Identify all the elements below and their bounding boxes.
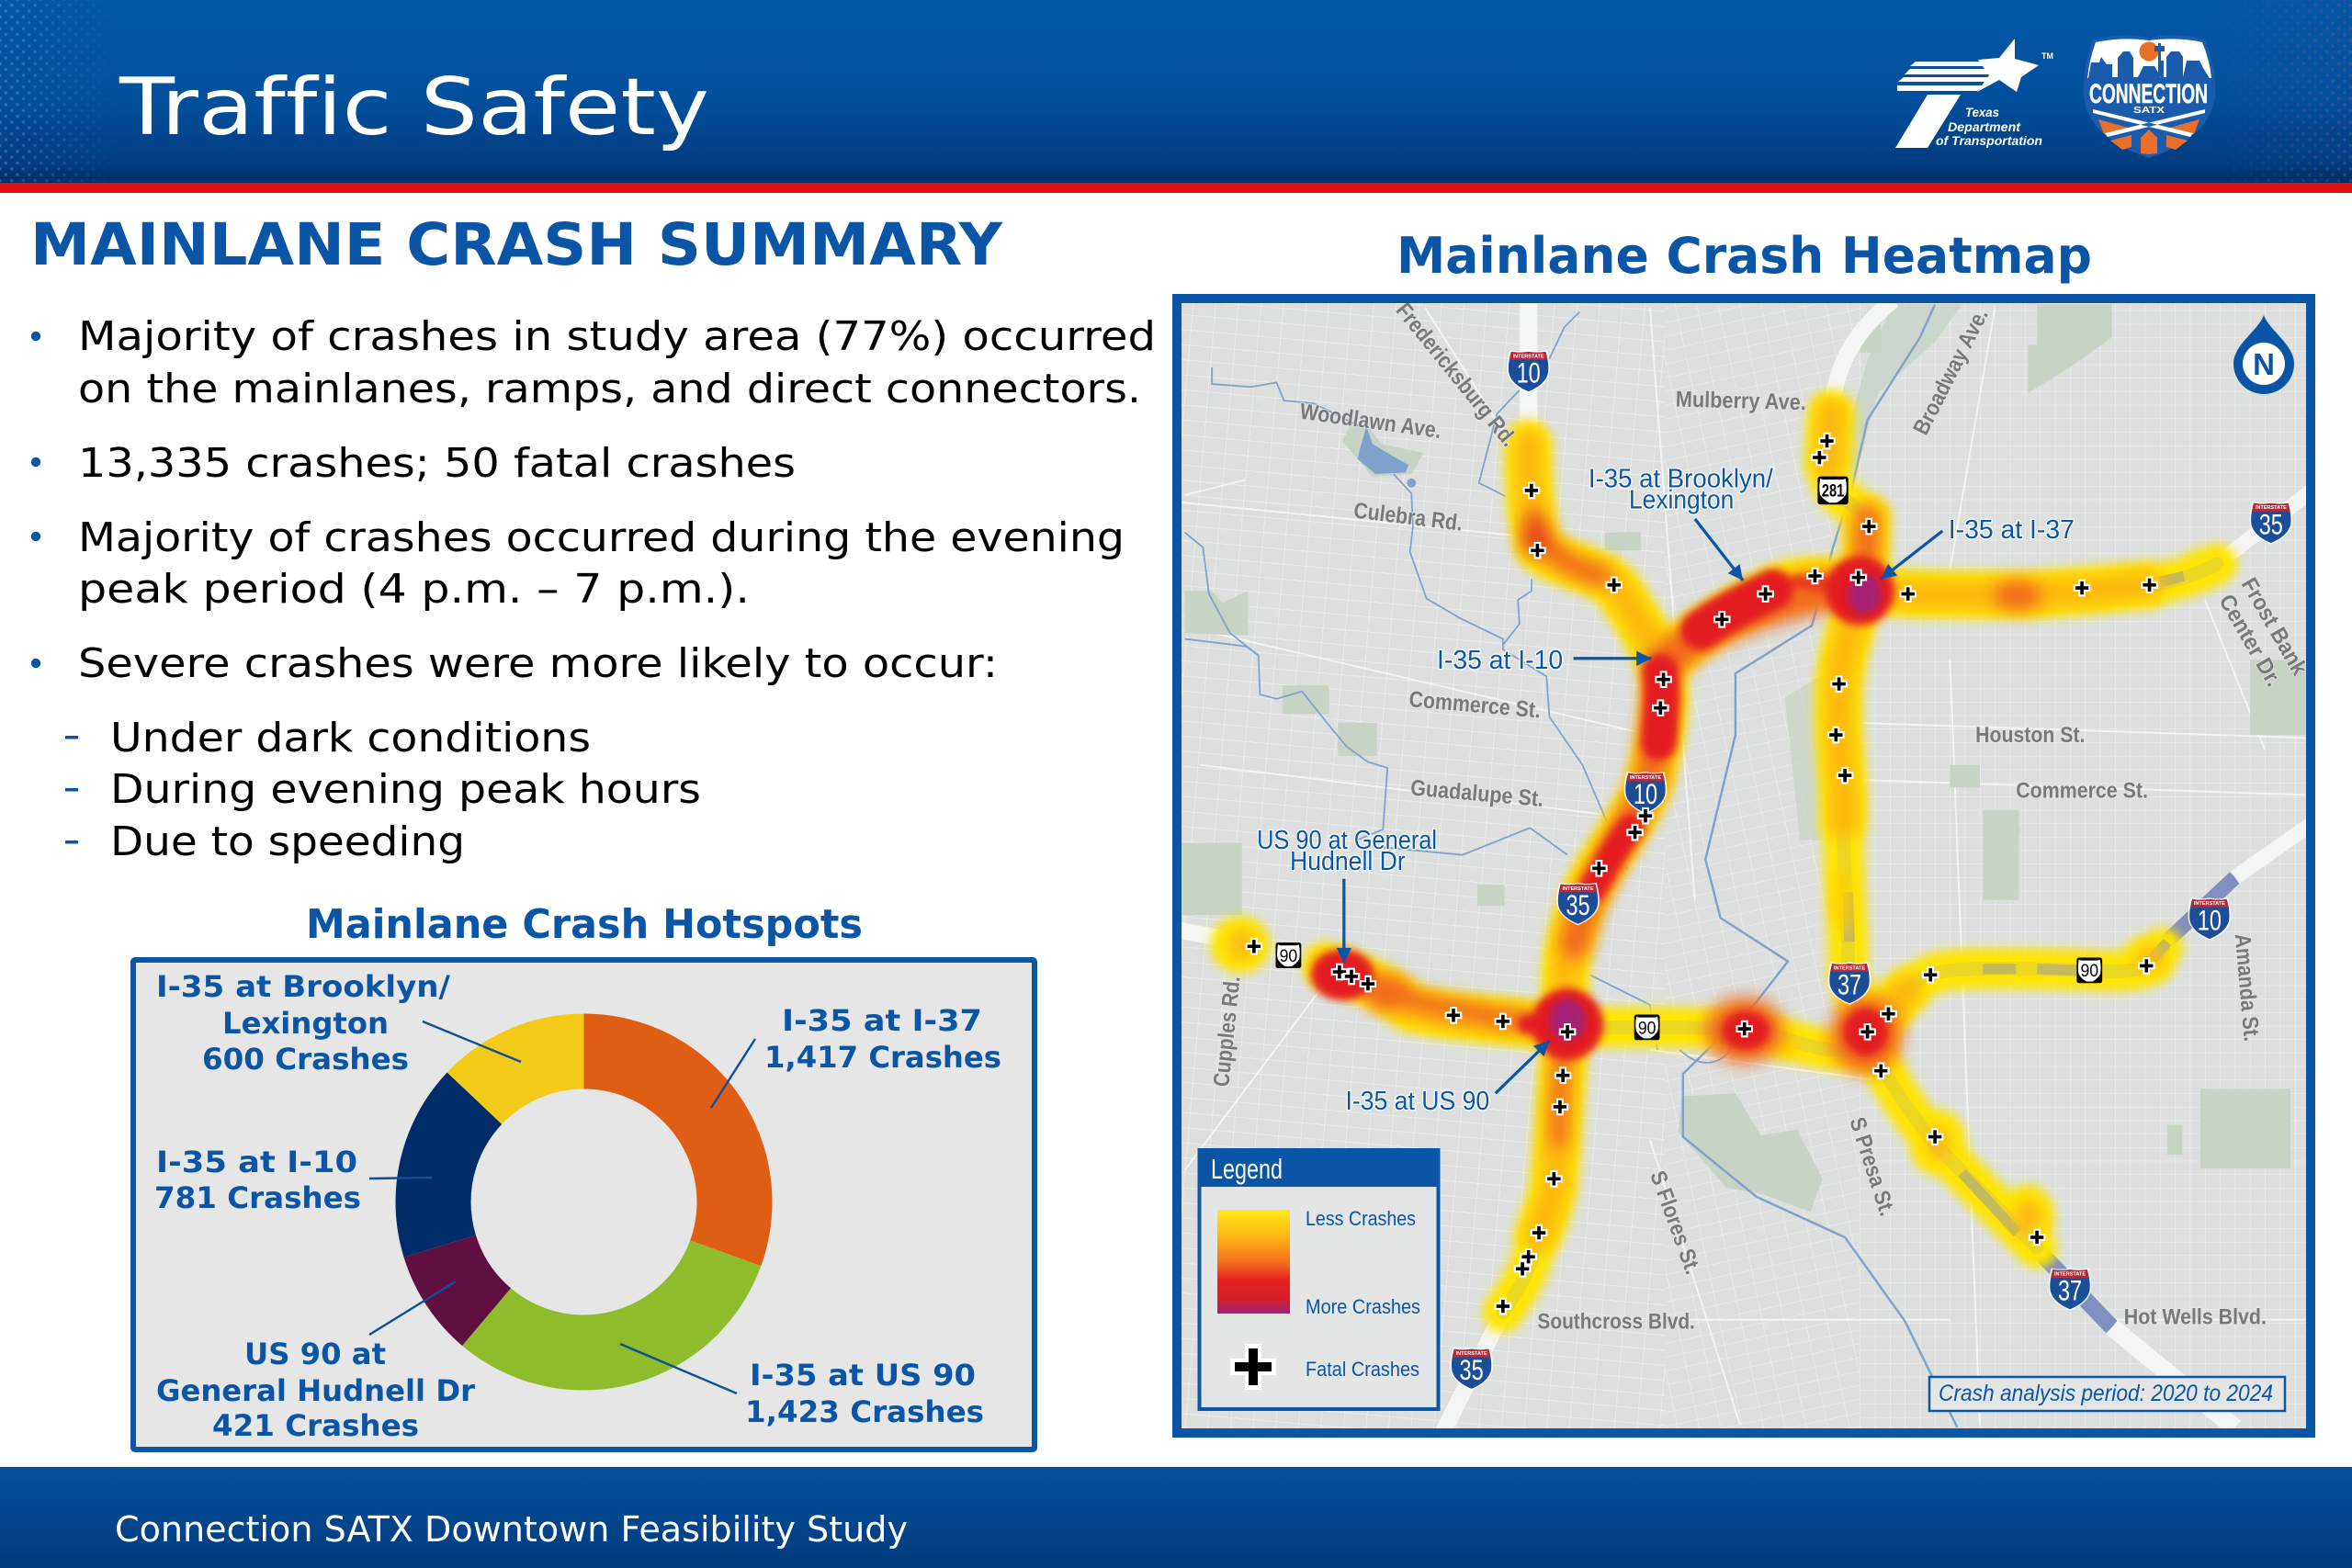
- label: US 90 at General Hudnell Dr: General Hudnell Dr: [156, 1373, 475, 1408]
- title: Traffic Safety: [119, 62, 709, 153]
- US highway shields: 90: [1638, 1018, 1657, 1038]
- US highway shields: 90: [2080, 961, 2098, 981]
- leader lines: [369, 1021, 755, 1393]
- road labels: Houston St.: [1975, 723, 2085, 748]
- icon: TxDOT logo: of Transportation: [1936, 133, 2042, 148]
- bullet list: crash summary: During evening peak hours: [110, 766, 701, 813]
- road labels: [1209, 299, 2312, 1335]
- icon: lake: [1358, 426, 1416, 488]
- road labels: Cupples Rd.: [1209, 975, 1246, 1088]
- interstate shields: 10: [1634, 778, 1657, 810]
- label: I-35 at I-10: I-35 at I-10: [156, 1145, 357, 1179]
- icon: north arrow: [2233, 315, 2294, 394]
- callout: I-35 at US 90: [1345, 1041, 1549, 1116]
- street grid: [1170, 292, 2310, 1448]
- bullet list: crash summary: Majority of crashes in study area (77%) occurred: [78, 313, 1156, 360]
- grey highway sections: [1848, 576, 2184, 1233]
- highways: [1178, 300, 2310, 1432]
- road labels: Southcross Blvd.: [1537, 1310, 1695, 1335]
- road labels: Fredericksburg Rd.: [1391, 299, 1521, 452]
- callout: US 90 at General Hudnell Dr: Hudnell Dr: [1290, 847, 1406, 876]
- label: I-35 at US 90: 1,423 Crashes: [745, 1394, 984, 1429]
- interstate shields: [1450, 350, 2292, 1391]
- callout: I-35 at Brooklyn/Lexington: Lexington: [1629, 486, 1734, 515]
- icon: TxDOT logo: Department: [1948, 119, 2021, 134]
- US highway shields: 281: [1822, 480, 1844, 501]
- red hotspots: [1311, 557, 1894, 1060]
- callout: I-35 at US 90: I-35 at US 90: [1345, 1087, 1489, 1116]
- interstate shields: 10: [1517, 356, 1541, 389]
- interstate shields: 35: [1566, 889, 1590, 921]
- legend: [1198, 1148, 1440, 1409]
- road labels: Center Dr.: [2213, 591, 2286, 691]
- label: I-35 at Brooklyn/Lexington: [156, 969, 450, 1077]
- road labels: Hot Wells Blvd.: [2124, 1305, 2267, 1330]
- bullet list: crash summary: Due to speeding: [110, 818, 465, 865]
- header banner: [0, 0, 2352, 193]
- label: I-35 at Brooklyn/Lexington: I-35 at Brooklyn/: [156, 969, 450, 1004]
- label: I-35 at I-10: 781 Crashes: [154, 1180, 361, 1215]
- callout: I-35 at I-37: [1881, 515, 2075, 579]
- interstate shields: 37: [2058, 1275, 2082, 1307]
- icon: north arrow: N: [2253, 347, 2275, 381]
- amber core: [1228, 411, 2163, 1237]
- heatmap map: [1182, 299, 2312, 1428]
- legend: More Crashes: [1306, 1295, 1420, 1318]
- heading: mainlane crash heatmap: Mainlane Crash Heatmap: [1396, 227, 2092, 285]
- callout: I-35 at I-10: I-35 at I-10: [1437, 646, 1563, 675]
- road labels: Commerce St.: [1408, 687, 1542, 724]
- legend: Fatal Crashes: [1306, 1358, 1419, 1381]
- road labels: Woodlawn Ave.: [1298, 400, 1442, 444]
- bullet list: crash summary: Majority of crashes occurred during the evening: [78, 514, 1125, 561]
- US highway shields: 90: [1280, 946, 1297, 966]
- orange core: [1340, 517, 2041, 1140]
- road labels: Commerce St.: [2016, 779, 2148, 804]
- icon: Connection SATX shield logo: [2084, 35, 2215, 158]
- bullet list: crash summary: 13,335 crashes; 50 fatal crashes: [78, 440, 796, 487]
- interstate shields: 35: [2259, 508, 2283, 540]
- icon: Connection SATX shield logo: SATX: [2133, 106, 2165, 116]
- icon: TxDOT logo: [1895, 39, 2053, 148]
- road labels: Culebra Rd.: [1352, 498, 1464, 536]
- legend fatal crash symbol: [1238, 1352, 1268, 1382]
- label: I-35 at Brooklyn/Lexington: 600 Crashes: [202, 1042, 409, 1077]
- interstate shields: 10: [2198, 904, 2222, 936]
- US highway shields: [1276, 477, 2102, 1040]
- road labels: S Flores St.: [1645, 1168, 1705, 1278]
- fatal crash markers: [1248, 434, 2156, 1313]
- heatmap bands: [1211, 393, 2226, 1313]
- legend: Legend: [1211, 1153, 1283, 1185]
- bullet list: crash summary: Severe crashes were more likely to occur:: [78, 640, 998, 687]
- interstate shields: 37: [1838, 968, 1861, 1000]
- heading: mainlane crash summary: MAINLANE CRASH SUMMARY: [30, 211, 1003, 278]
- icon: Connection SATX shield logo: CONNECTION: [2089, 79, 2208, 109]
- heading: mainlane crash hotspots: Mainlane Crash Hotspots: [306, 901, 863, 948]
- road labels: S Presa St.: [1844, 1114, 1899, 1219]
- bullet list: crash summary: [31, 313, 1156, 865]
- yellow halo: [1211, 393, 2226, 1313]
- label: US 90 at General Hudnell Dr: 421 Crashes: [212, 1408, 419, 1443]
- callout: I-35 at Brooklyn/Lexington: [1589, 465, 1773, 581]
- legend: Less Crashes: [1306, 1207, 1416, 1230]
- panel: hotspots donut chart: [133, 960, 1035, 1450]
- interstate shields: 35: [1460, 1354, 1484, 1386]
- footer text: Connection SATX Downtown Feasibility Study: [115, 1509, 908, 1550]
- crash analysis period note: Crash analysis period: 2020 to 2024: [1939, 1381, 2273, 1406]
- bullet list: crash summary: peak period (4 p.m. – 7 p.m.).: [78, 566, 750, 613]
- purple centres: [1549, 574, 1881, 1041]
- weak band road core: [1503, 465, 2217, 1313]
- road labels: Amanda St.: [2230, 932, 2264, 1043]
- label: US 90 at General Hudnell Dr: US 90 at: [244, 1337, 386, 1371]
- callout: US 90 at General Hudnell Dr: US 90 at General: [1257, 826, 1437, 855]
- icon: TxDOT logo: Texas: [1965, 105, 1999, 119]
- label: I-35 at US 90: I-35 at US 90: [750, 1358, 976, 1393]
- footer banner: [0, 1467, 2352, 1568]
- legend gradient bar: [1217, 1210, 1290, 1314]
- label: I-35 at Brooklyn/Lexington: Lexington: [222, 1006, 389, 1041]
- label: I-35 at US 90: [745, 1358, 984, 1429]
- label: I-35 at I-37: I-35 at I-37: [782, 1003, 982, 1038]
- donut chart: [434, 1051, 735, 1352]
- label: I-35 at I-10: [154, 1145, 361, 1215]
- panel: map frame: [1177, 299, 2311, 1433]
- parks: [1182, 304, 2305, 1212]
- label: US 90 at General Hudnell Dr: [156, 1337, 475, 1443]
- callout: I-35 at I-37: I-35 at I-37: [1949, 515, 2075, 545]
- bullet list: crash summary: on the mainlanes, ramps, and direct connectors.: [78, 366, 1141, 412]
- rivers: [1185, 304, 1958, 1427]
- bullet list: crash summary: Under dark conditions: [110, 715, 591, 761]
- label: I-35 at I-37: 1,417 Crashes: [764, 1040, 1001, 1075]
- callout: US 90 at General Hudnell Dr: [1257, 826, 1437, 963]
- icon: TxDOT logo: TM: [2041, 51, 2053, 61]
- road labels: Guadalupe St.: [1409, 775, 1544, 812]
- road labels: Mulberry Ave.: [1675, 388, 1806, 415]
- label: I-35 at I-37: [764, 1003, 1001, 1075]
- callout: I-35 at Brooklyn/Lexington: I-35 at Brooklyn/: [1589, 465, 1773, 494]
